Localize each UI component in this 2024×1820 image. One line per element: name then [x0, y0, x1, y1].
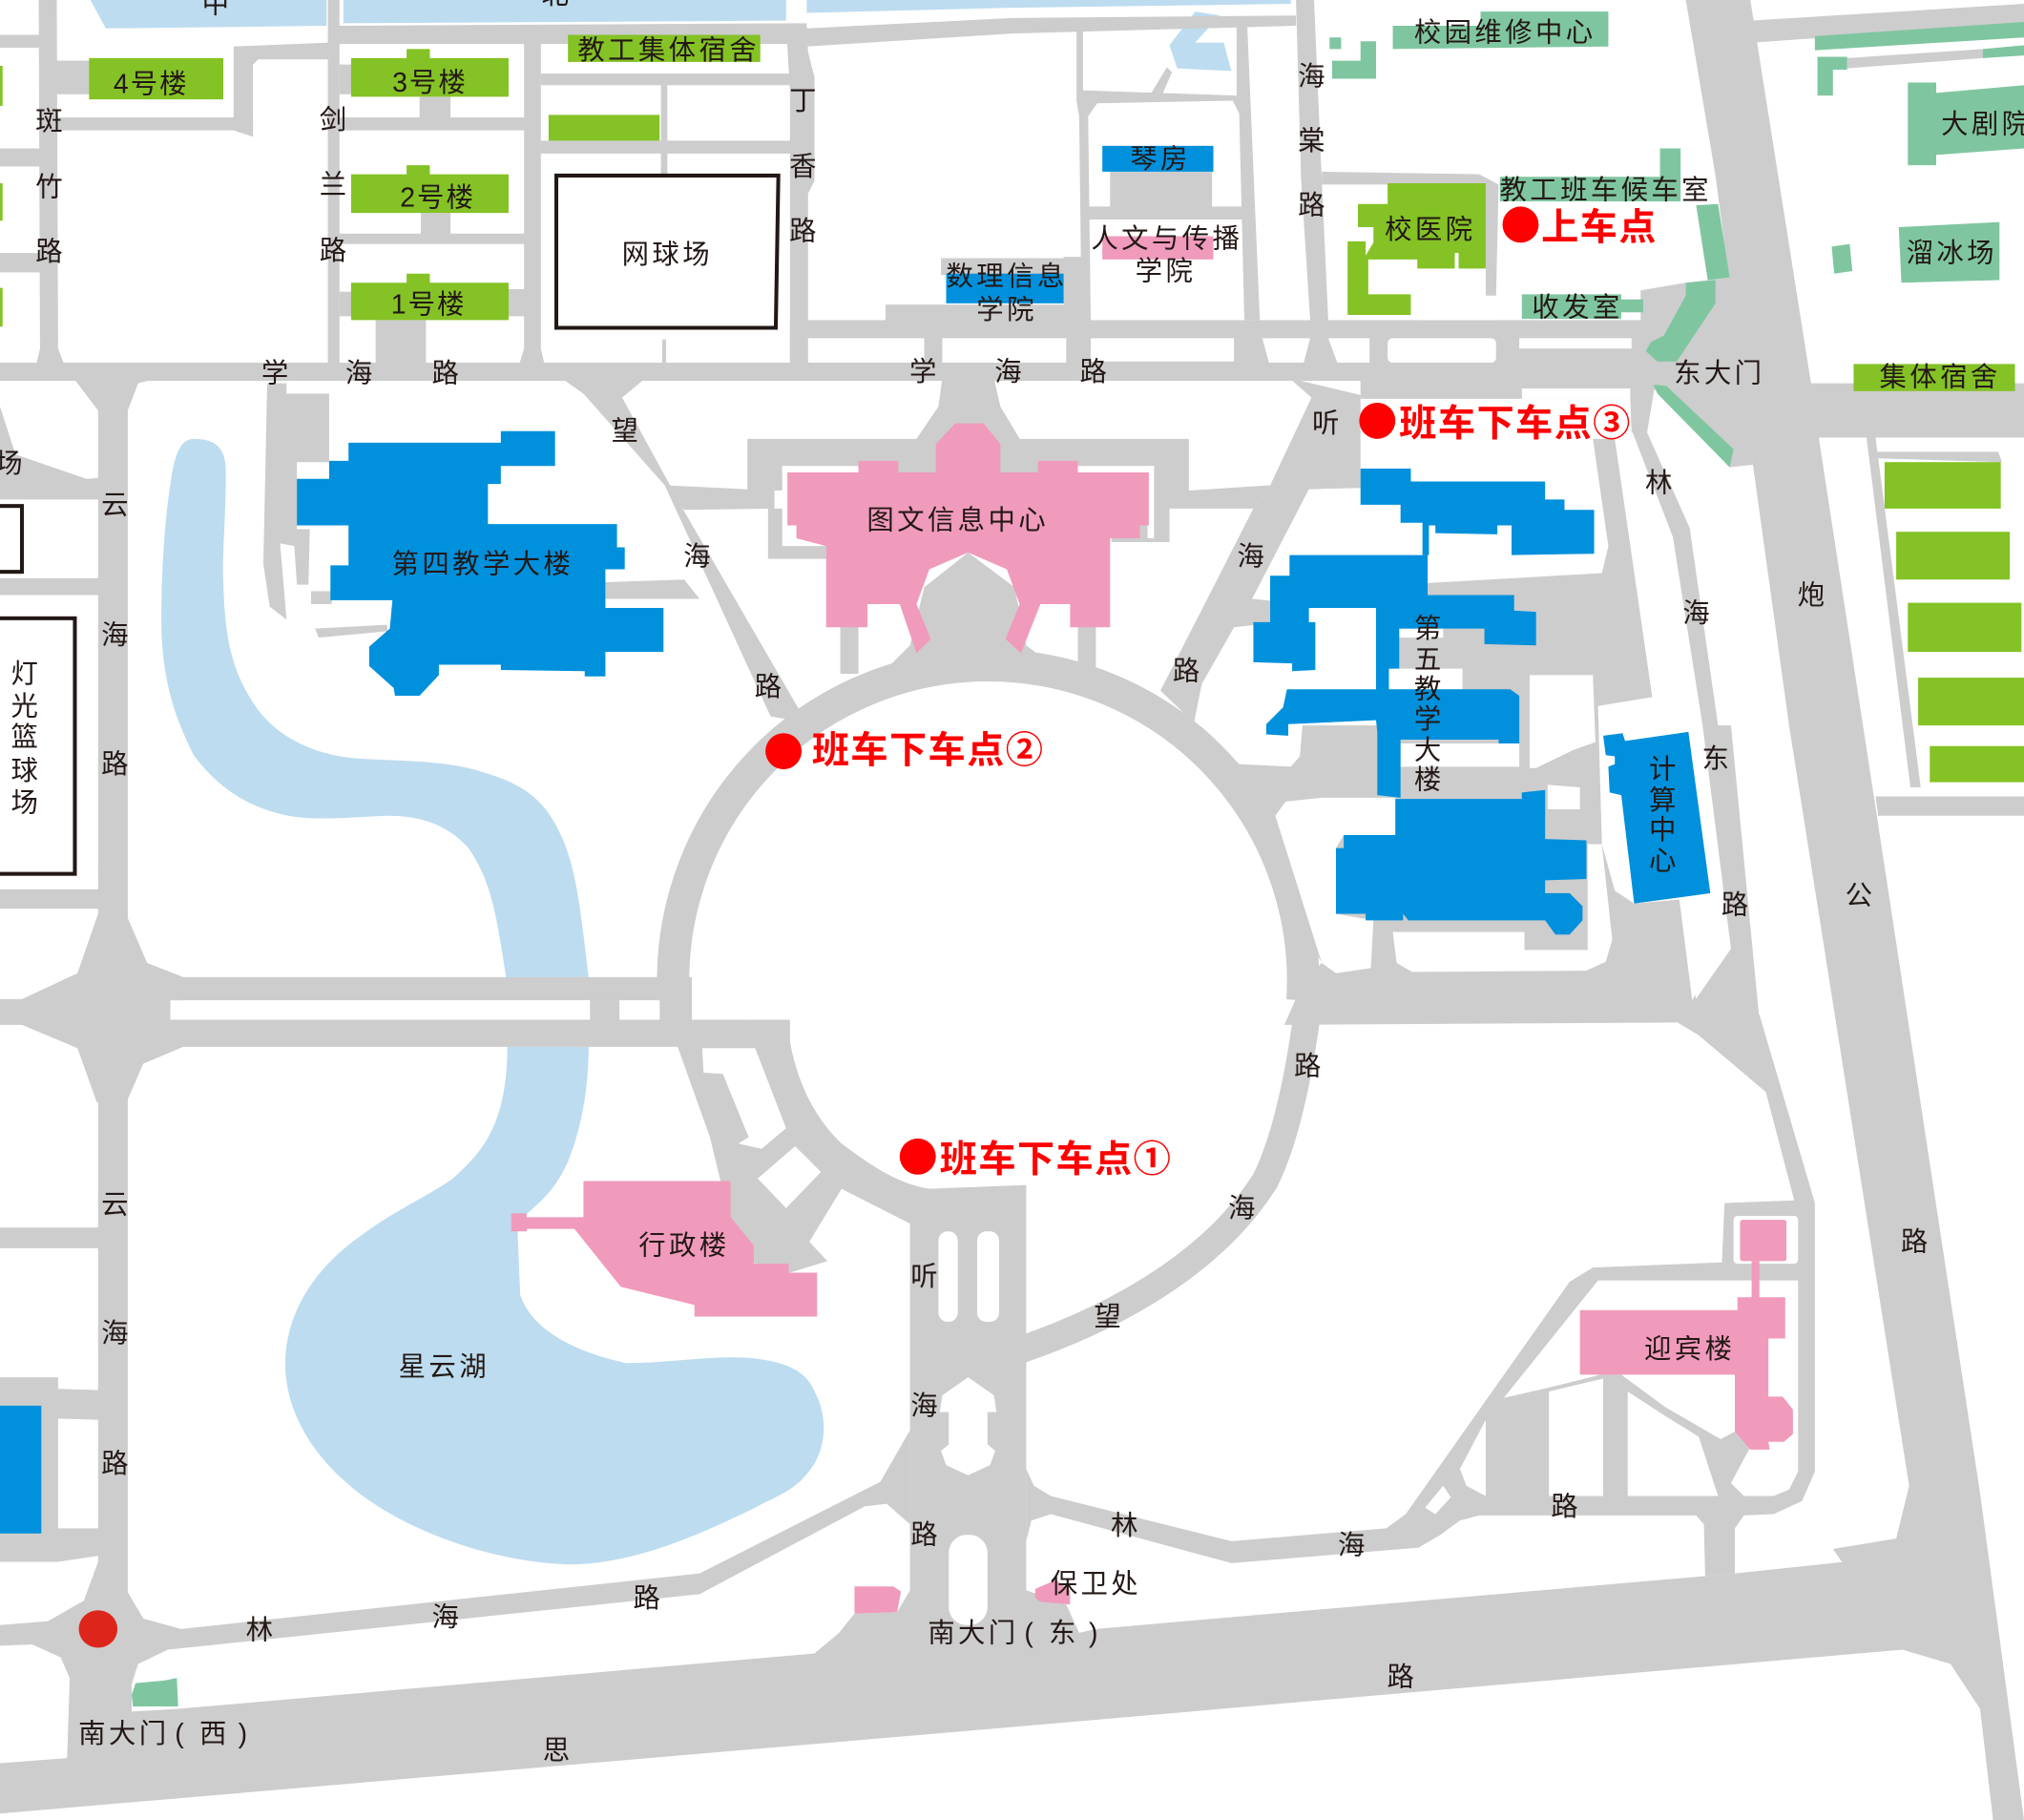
gate label: 南大门（东）: ( — [1024, 1618, 1033, 1648]
building: 第五教学大楼 — [1253, 469, 1595, 934]
building: 第五教学大楼: 学 — [1414, 704, 1441, 735]
road names: 路 — [789, 217, 817, 247]
south-west 林海路 — [127, 1431, 910, 1663]
building: 计算中心 — [1603, 732, 1710, 904]
building: 行政楼: 行政楼 — [638, 1231, 730, 1262]
road names: 海 — [910, 1391, 938, 1421]
road names: 听 — [1312, 408, 1339, 439]
building: 第五教学大楼: 五 — [1414, 645, 1441, 676]
marker: drop-off point 1: 班车下车点① — [940, 1139, 1172, 1181]
marker: drop-off point 3: 班车下车点③ — [1399, 403, 1632, 445]
panel: left edge buildings — [0, 66, 41, 1534]
court: 灯光篮球场: 灯 — [10, 659, 38, 689]
road names: 路 — [431, 358, 459, 388]
building: 4号楼: 4号楼 — [114, 69, 189, 99]
building: 计算中心: 心 — [1649, 847, 1676, 877]
road names: 望 — [611, 416, 638, 447]
road names: 公 — [1846, 881, 1872, 911]
building: 校医院 — [1347, 183, 1486, 315]
marker: drop-off point 2: 班车下车点② — [812, 729, 1044, 771]
琴房 enclosure — [1076, 18, 1260, 320]
road names: 路 — [1901, 1227, 1928, 1258]
road names: 海 — [1228, 1193, 1255, 1224]
building: 计算中心: 计 — [1649, 755, 1676, 785]
building: 第五教学大楼: 第 — [1414, 614, 1441, 644]
building: south gate guard box — [854, 1586, 901, 1614]
building: 2号楼: 2号楼 — [400, 182, 475, 213]
road names: 林 — [1111, 1511, 1137, 1541]
building: 图文信息中心 — [787, 424, 1149, 653]
road names: 路 — [755, 672, 782, 702]
west 云海路 and crossing — [98, 381, 128, 1594]
road names: 路 — [101, 1449, 129, 1479]
building: west gate lodge — [132, 1678, 178, 1706]
building: 琴房 — [1102, 144, 1214, 175]
building: 琴房: 琴房 — [1130, 144, 1191, 175]
building: 第五教学大楼: 楼 — [1414, 764, 1441, 795]
思路 south road — [0, 1538, 1951, 1813]
building: 1号楼: 1号楼 — [391, 290, 466, 321]
south-east 林海路 and 迎宾 loop — [1026, 1015, 1815, 1576]
road names: 竹 — [35, 173, 63, 203]
road names: 香 — [789, 152, 817, 182]
buildings: east dormitories — [1885, 462, 2024, 783]
gate label: 南大门（西） — [78, 1719, 247, 1749]
gate label: 南大门（西）: 南大门 — [78, 1719, 170, 1749]
building: north-east teal blocks — [1815, 22, 2024, 274]
building: 3号楼 — [351, 49, 509, 98]
white islands between roads — [171, 297, 1798, 1625]
road names: 路 — [1294, 1052, 1321, 1082]
building: 迎宾楼 — [1580, 1220, 1793, 1450]
road names: 海 — [1338, 1530, 1365, 1560]
building: small teal blocks — [1329, 37, 1376, 79]
building: 计算中心: 中 — [1649, 815, 1676, 846]
road names: 斑 — [35, 107, 63, 137]
gate label: 南大门（西）: ( — [175, 1719, 184, 1749]
gate label: 东大门: 东大门 — [1674, 358, 1764, 388]
road names: 路 — [1298, 191, 1325, 221]
road names: 云 — [101, 490, 129, 520]
gate label: 南大门（东）: 东 — [1049, 1618, 1075, 1648]
road names: 路 — [320, 236, 346, 266]
building: 第四教学大楼 — [297, 431, 663, 696]
road names: 林 — [1645, 468, 1672, 498]
court: 灯光篮球场: 场 — [10, 788, 38, 819]
road names: 海 — [1238, 541, 1264, 572]
road names: 思 — [543, 1735, 570, 1766]
building: 4号楼 — [89, 58, 223, 99]
building: 第四教学大楼: 第四教学大楼 — [392, 550, 574, 580]
north-west streets — [329, 23, 806, 44]
building: 第五教学大楼: 大 — [1414, 735, 1441, 765]
听海路 east diagonal — [1160, 378, 1361, 722]
building: unnamed green block — [549, 115, 659, 140]
road names: 路 — [35, 237, 63, 267]
building: 数理信息学院: 学院 — [976, 295, 1037, 325]
building: 图文信息中心: 图文信息中心 — [866, 506, 1049, 536]
road names: 海 — [994, 357, 1022, 387]
building: 溜冰场 — [1899, 222, 1999, 282]
building: 保卫处: 保卫处 — [1051, 1569, 1141, 1600]
court: 灯光篮球场 — [0, 618, 74, 874]
marker: west gate dot — [79, 1610, 117, 1647]
gate label: 南大门（西）: 西 — [199, 1719, 226, 1749]
building: 计算中心: 算 — [1649, 785, 1676, 816]
road names: 海 — [683, 541, 711, 572]
building: 校园维修中心: 校园维修中心 — [1414, 17, 1596, 48]
road names: 海 — [1682, 598, 1710, 629]
road names: 海 — [1298, 61, 1325, 92]
building: 教工班车候车室: 教工班车候车室 — [1500, 175, 1712, 205]
building: 行政楼 — [511, 1182, 817, 1317]
gate label: 南大门（东）: ) — [1089, 1618, 1097, 1648]
circle ring — [673, 665, 1304, 1000]
building: 人文与传播学院: 人文与传播 — [1091, 224, 1242, 255]
road names: 路 — [1173, 657, 1200, 687]
road names: 兰 — [320, 170, 346, 200]
court: 网球场 — [556, 176, 779, 328]
road names: 东 — [1702, 744, 1729, 775]
road names: 望 — [1094, 1302, 1121, 1332]
road names: 学 — [261, 358, 288, 388]
building: 数理信息学院 — [947, 261, 1068, 325]
building: 1号楼 — [351, 274, 509, 321]
road names: 海 — [431, 1602, 459, 1633]
building: 3号楼: 3号楼 — [392, 68, 468, 98]
road names: 剑 — [320, 105, 346, 136]
road names: 海 — [101, 620, 129, 651]
building: 数理信息学院: 数理信息 — [947, 261, 1068, 292]
gate label: 南大门（东） — [928, 1618, 1097, 1648]
第五教学 block — [1194, 439, 1760, 1025]
road names: 海 — [345, 358, 372, 388]
road names: 棠 — [1298, 126, 1325, 157]
court: 灯光篮球场: 球 — [10, 756, 38, 786]
road names: 听 — [910, 1262, 938, 1292]
court: 灯光篮球场: 光 — [10, 691, 38, 722]
gate label: 南大门（东）: 南大门 — [928, 1618, 1019, 1648]
lake label: 星云湖: 星云湖 — [399, 1352, 490, 1383]
main road 炮公路 — [1686, 0, 2024, 1820]
marker: boarding point 上车点: 上车点 — [1541, 207, 1658, 249]
图文 frame and spokes — [747, 378, 1270, 542]
building: 人文与传播学院 — [1091, 224, 1242, 286]
building: 第五教学大楼: 教 — [1414, 675, 1441, 705]
building: 教工集体宿舍: 教工集体宿舍 — [577, 35, 760, 66]
court: 网球场: 网球场 — [622, 240, 713, 270]
road names: 路 — [910, 1520, 938, 1551]
road names: 学 — [909, 357, 936, 387]
road names: 炮 — [1798, 580, 1825, 611]
court: 灯光篮球场: 篮 — [10, 722, 38, 753]
road names: 路 — [1387, 1662, 1414, 1692]
building: 校园维修中心 — [1393, 11, 1608, 49]
building: 教工班车候车室 — [1500, 149, 1712, 205]
海棠路 — [1296, 0, 1331, 364]
road names: 路 — [633, 1583, 660, 1614]
water: 星云湖 lake and creek — [161, 439, 824, 1564]
water: north canal and pond — [91, 0, 1291, 71]
building: 溜冰场: 溜冰场 — [1907, 239, 1997, 269]
road names: 路 — [1080, 357, 1107, 387]
第四教学 spur — [263, 384, 329, 619]
building: 集体宿舍: 集体宿舍 — [1880, 362, 2001, 392]
road names: 云 — [101, 1189, 129, 1220]
数理 surrounds — [941, 258, 1090, 275]
building: 迎宾楼: 迎宾楼 — [1644, 1334, 1735, 1365]
望海路 west diagonal — [561, 378, 806, 722]
east gate teal strips — [1646, 204, 1734, 468]
building: 收发室: 收发室 — [1532, 292, 1623, 323]
road names: 林 — [246, 1616, 273, 1646]
building: 人文与传播学院: 学院 — [1136, 256, 1196, 286]
east-west avenue to circle — [171, 977, 667, 1000]
gate label: 南大门（西）: ) — [239, 1719, 247, 1749]
东大门 plaza — [1639, 278, 1753, 468]
road names: 路 — [1721, 890, 1748, 921]
building: 大剧院 — [1908, 83, 2024, 165]
building: 2号楼 — [351, 165, 509, 213]
road names: 路 — [101, 749, 129, 780]
building: 校医院: 校医院 — [1385, 215, 1475, 245]
东林海路 — [1632, 429, 1760, 1019]
学海路 double band — [0, 363, 1807, 381]
road names: 路 — [1551, 1492, 1578, 1522]
road names: 海 — [101, 1319, 129, 1349]
road names: 丁 — [789, 86, 817, 116]
